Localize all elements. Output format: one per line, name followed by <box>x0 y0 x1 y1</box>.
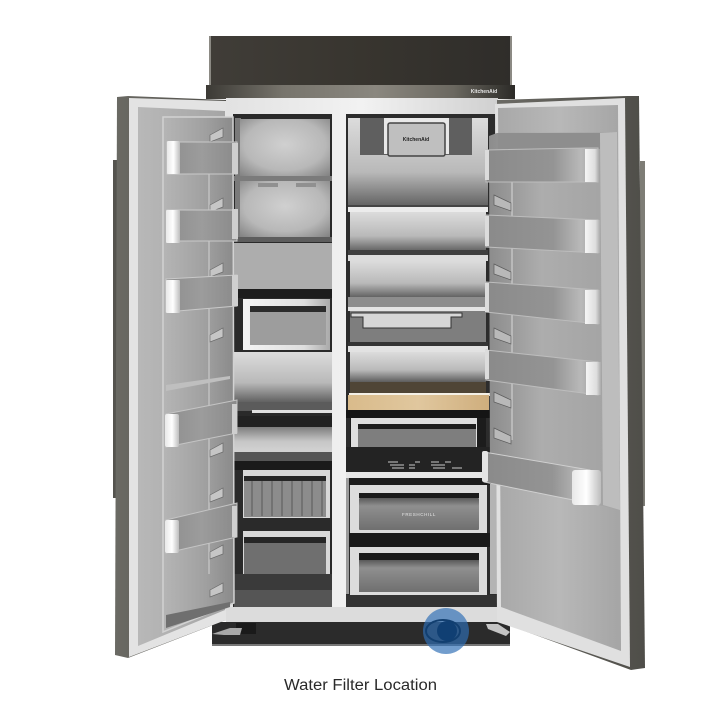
right door <box>482 96 645 670</box>
left handle strip <box>113 160 117 498</box>
left door liner <box>163 117 234 632</box>
wood drawer <box>348 382 490 410</box>
top grille <box>209 36 512 86</box>
door bin 2 <box>166 209 238 243</box>
water filter highlight <box>423 608 469 654</box>
control panel <box>346 447 492 472</box>
door bin 2 <box>485 215 600 253</box>
drawer side rails <box>346 478 497 594</box>
door bin 4 <box>485 350 601 395</box>
right freezer interior <box>346 114 497 608</box>
ice module: KitchenAid <box>403 137 429 143</box>
bottom pantry drawer <box>350 547 487 595</box>
left door <box>115 96 238 658</box>
cabinet frame <box>226 98 498 623</box>
door bin 3 <box>485 282 600 324</box>
shelf supports <box>210 128 223 597</box>
door bin 3 <box>166 275 238 313</box>
base panel <box>226 607 498 623</box>
right door liner <box>489 132 620 510</box>
door bin 5 <box>482 451 601 505</box>
thin door rail <box>166 376 230 391</box>
brand band: KitchenAid <box>471 89 497 95</box>
left refrigerator interior <box>233 114 332 608</box>
upper drawer <box>243 299 330 350</box>
refrigerator <box>113 36 645 670</box>
brand band <box>206 85 515 99</box>
toe kick <box>212 622 510 646</box>
caption: Water Filter Location <box>284 677 437 694</box>
shelf supports <box>494 195 511 444</box>
door bin 5 <box>165 503 237 553</box>
lower pantry drawer <box>350 485 487 533</box>
ice module <box>360 118 472 156</box>
right handle strip <box>640 161 645 506</box>
door bin 1 <box>485 148 599 182</box>
lower basket <box>243 531 330 577</box>
freezer basket <box>243 470 330 518</box>
upper pantry drawer <box>350 418 486 447</box>
lower pantry drawer: FRESHCHILL <box>402 512 436 517</box>
door bin 4 <box>165 400 237 447</box>
door bin 1 <box>167 141 238 174</box>
crisper tray <box>351 313 462 328</box>
door bottom shelf <box>166 602 230 628</box>
water filter cap <box>426 620 460 642</box>
